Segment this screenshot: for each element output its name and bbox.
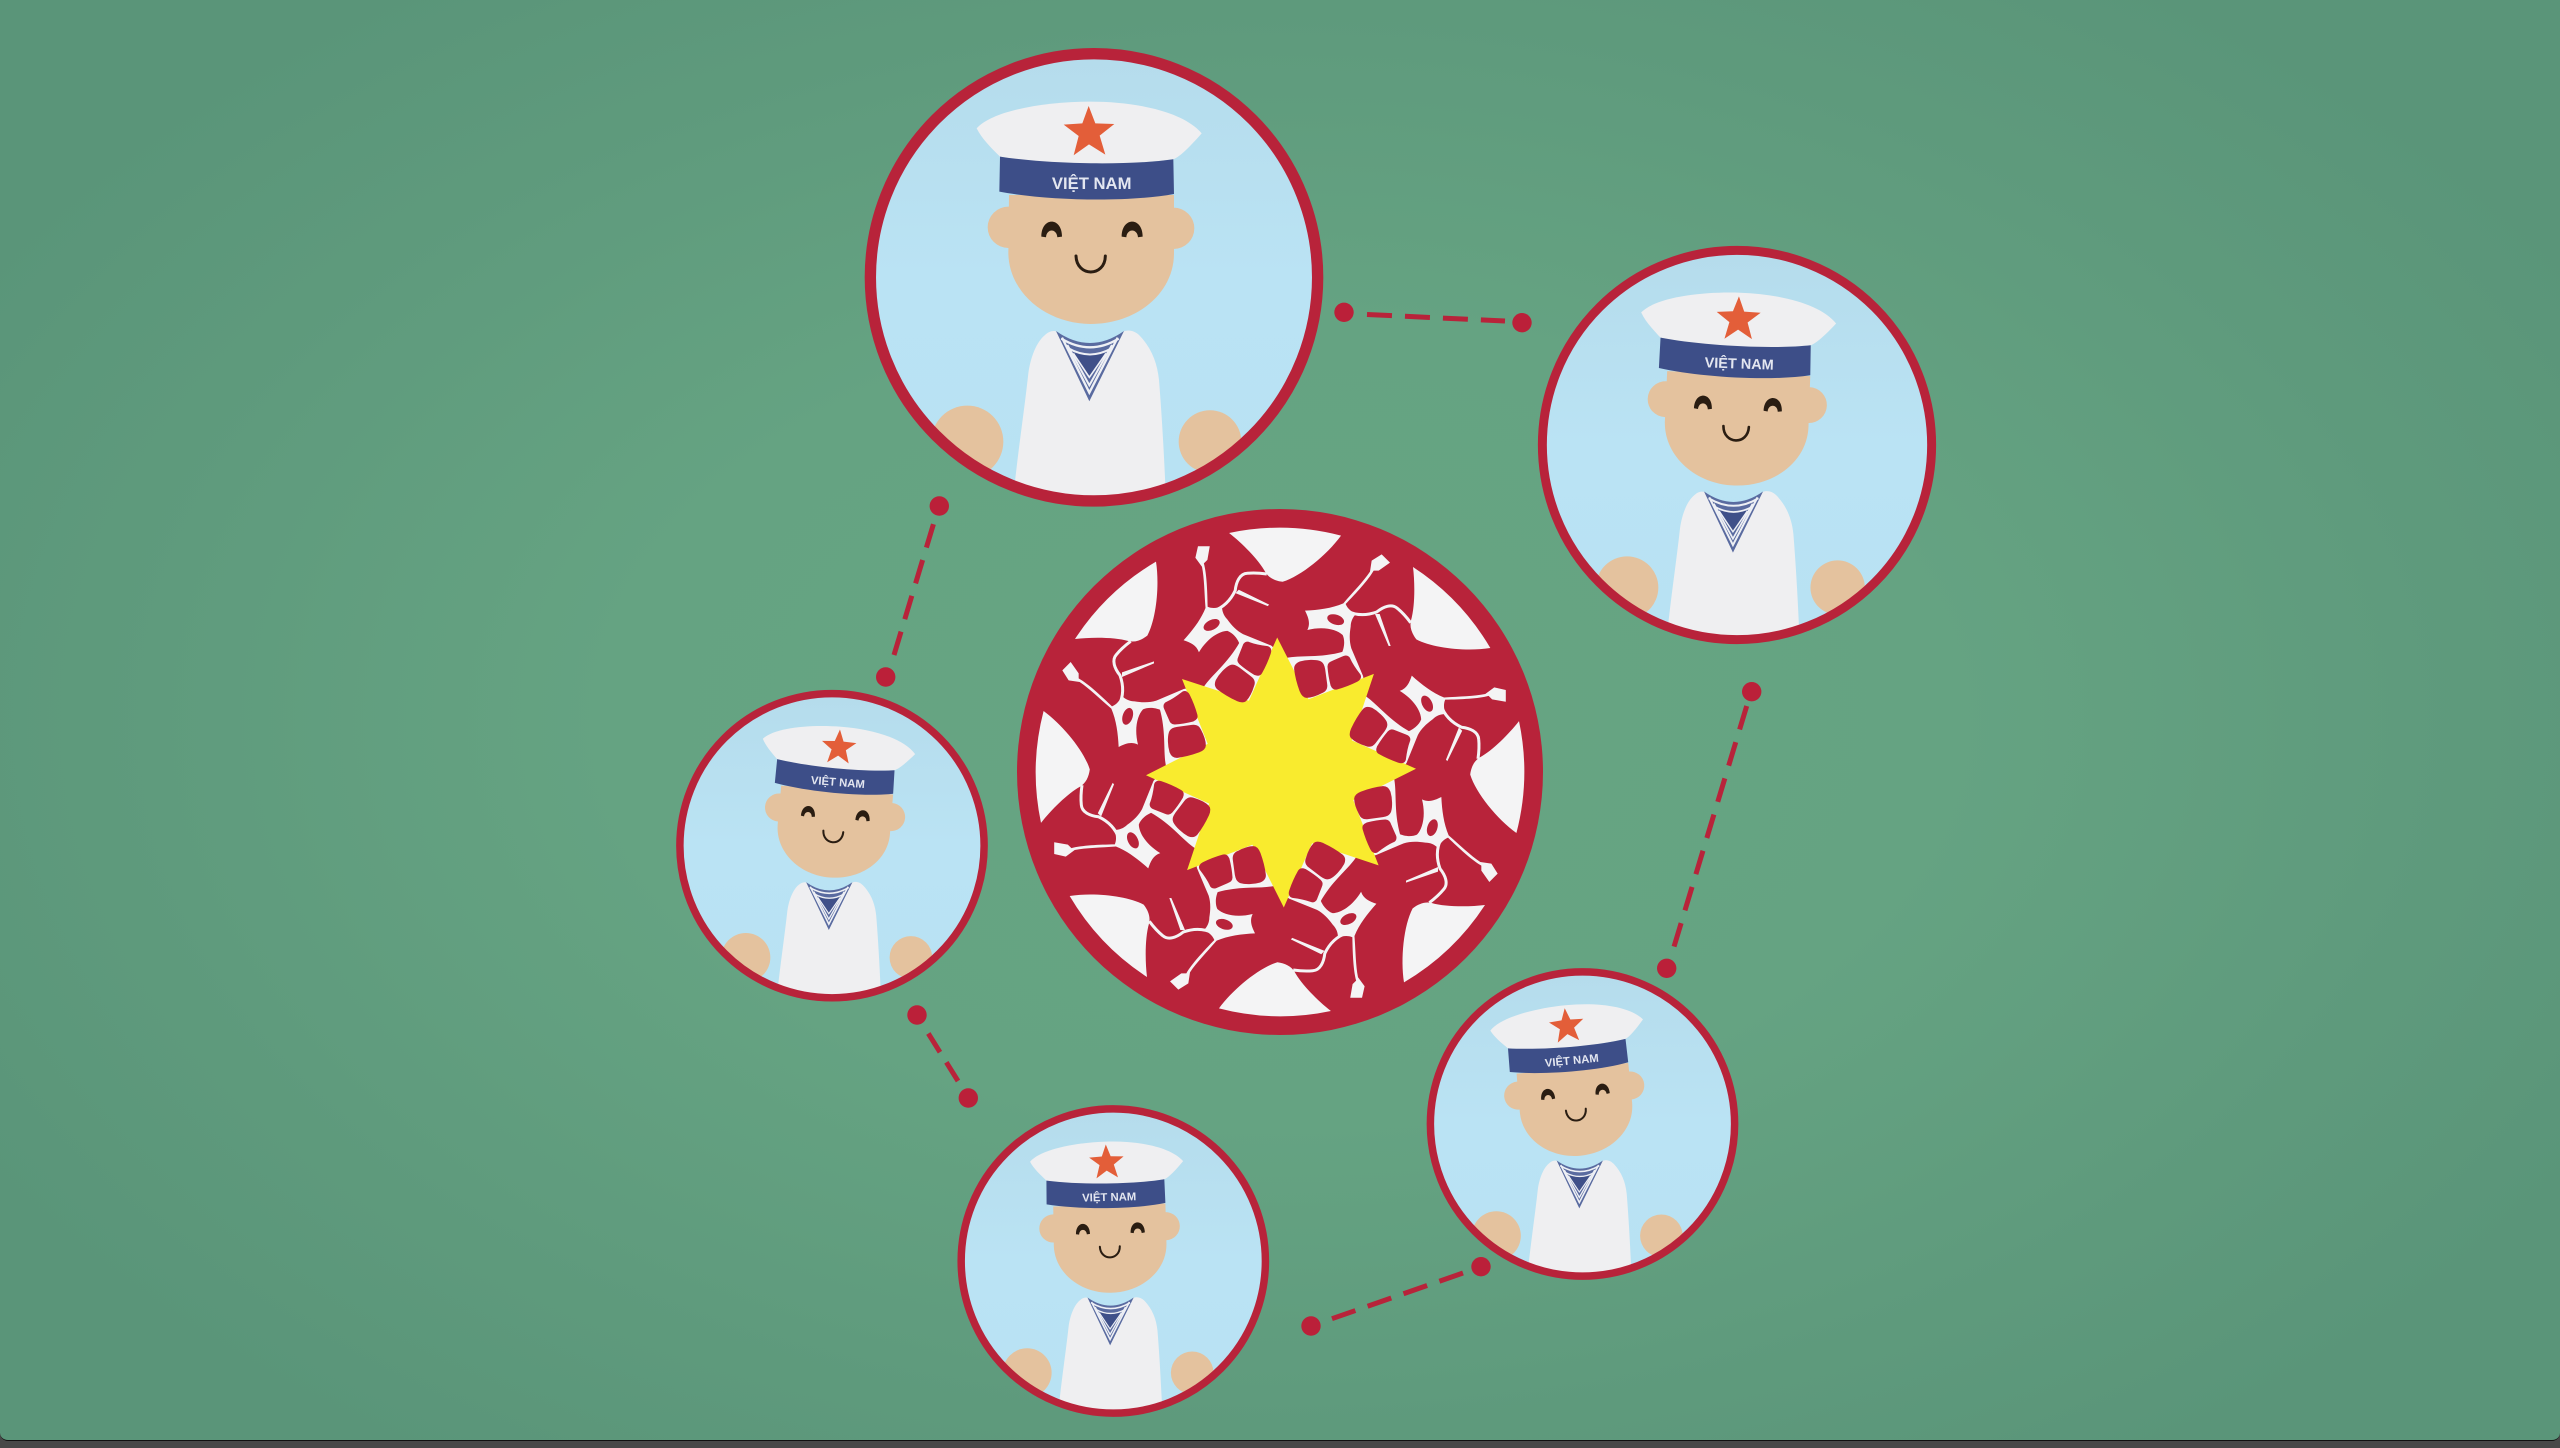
sailor portrait: top (870, 54, 1318, 513)
dashed connector: bottom to left (907, 1005, 978, 1108)
sailor portrait: top: VIỆT NAM (1052, 174, 1131, 193)
emblem red disc (1017, 509, 1543, 1035)
sailor portrait: lower right: VIỆT NAM (1544, 1052, 1599, 1070)
fists over the star (1142, 634, 1418, 910)
dashed connector: top to upper right (1334, 303, 1532, 332)
sailor portrait: upper right (1542, 250, 1932, 650)
sailor portrait: lower right (1430, 972, 1735, 1285)
dashed connector: left to top (876, 496, 949, 687)
dashed connector: lower right to bottom (1301, 1257, 1491, 1336)
sailor portrait: upper right: VIỆT NAM (1704, 353, 1774, 374)
sailor portrait: left (680, 694, 984, 1006)
emblem: hands around a yellow star (977, 469, 1583, 1075)
sailor portrait: left: VIỆT NAM (810, 774, 865, 791)
sailor portrait: bottom: VIỆT NAM (1082, 1190, 1136, 1205)
infographic scene (676, 48, 1936, 1417)
dashed connector: upper right to lower right (1657, 682, 1761, 978)
white wedges and gaps between hands (977, 469, 1583, 1075)
yellow eight-pointed star (1146, 638, 1416, 908)
sailor portrait: bottom (961, 1109, 1265, 1422)
